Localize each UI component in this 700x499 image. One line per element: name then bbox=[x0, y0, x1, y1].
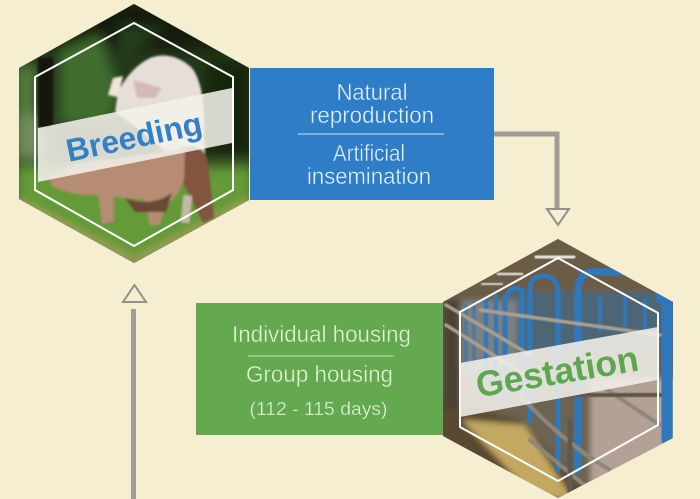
connector arrow: breeding to gestation bbox=[494, 134, 569, 225]
return arrow up to breeding bbox=[123, 285, 146, 499]
feeding pig in front bbox=[48, 148, 185, 226]
label band bbox=[460, 327, 658, 417]
text: insemination: insemination bbox=[307, 163, 431, 189]
tree trunk bbox=[38, 58, 53, 128]
standing pig behind bbox=[115, 56, 205, 160]
label: Breeding: Breeding bbox=[63, 105, 205, 169]
inner hexagon outline bbox=[460, 258, 658, 481]
blue stall frames bbox=[530, 276, 558, 470]
hexagon: breeding photo with label bbox=[15, 0, 255, 270]
text: natural: Natural bbox=[336, 79, 408, 105]
label band bbox=[38, 88, 232, 182]
ceiling lights bbox=[536, 256, 574, 258]
text: artificial: Artificial bbox=[333, 140, 405, 166]
hexagon: gestation photo with label bbox=[440, 235, 680, 499]
text: reproduction: reproduction bbox=[310, 102, 434, 128]
panel: breeding options box bbox=[250, 68, 494, 200]
label: Gestation: Gestation bbox=[473, 338, 641, 405]
text: group housing: Group housing bbox=[246, 361, 393, 387]
inner hexagon outline bbox=[35, 23, 233, 246]
grey rails bbox=[446, 305, 660, 375]
text: duration: (112 - 115 days) bbox=[250, 399, 388, 419]
text: individual housing: Individual housing bbox=[232, 321, 411, 347]
panel: gestation options box bbox=[196, 303, 444, 435]
